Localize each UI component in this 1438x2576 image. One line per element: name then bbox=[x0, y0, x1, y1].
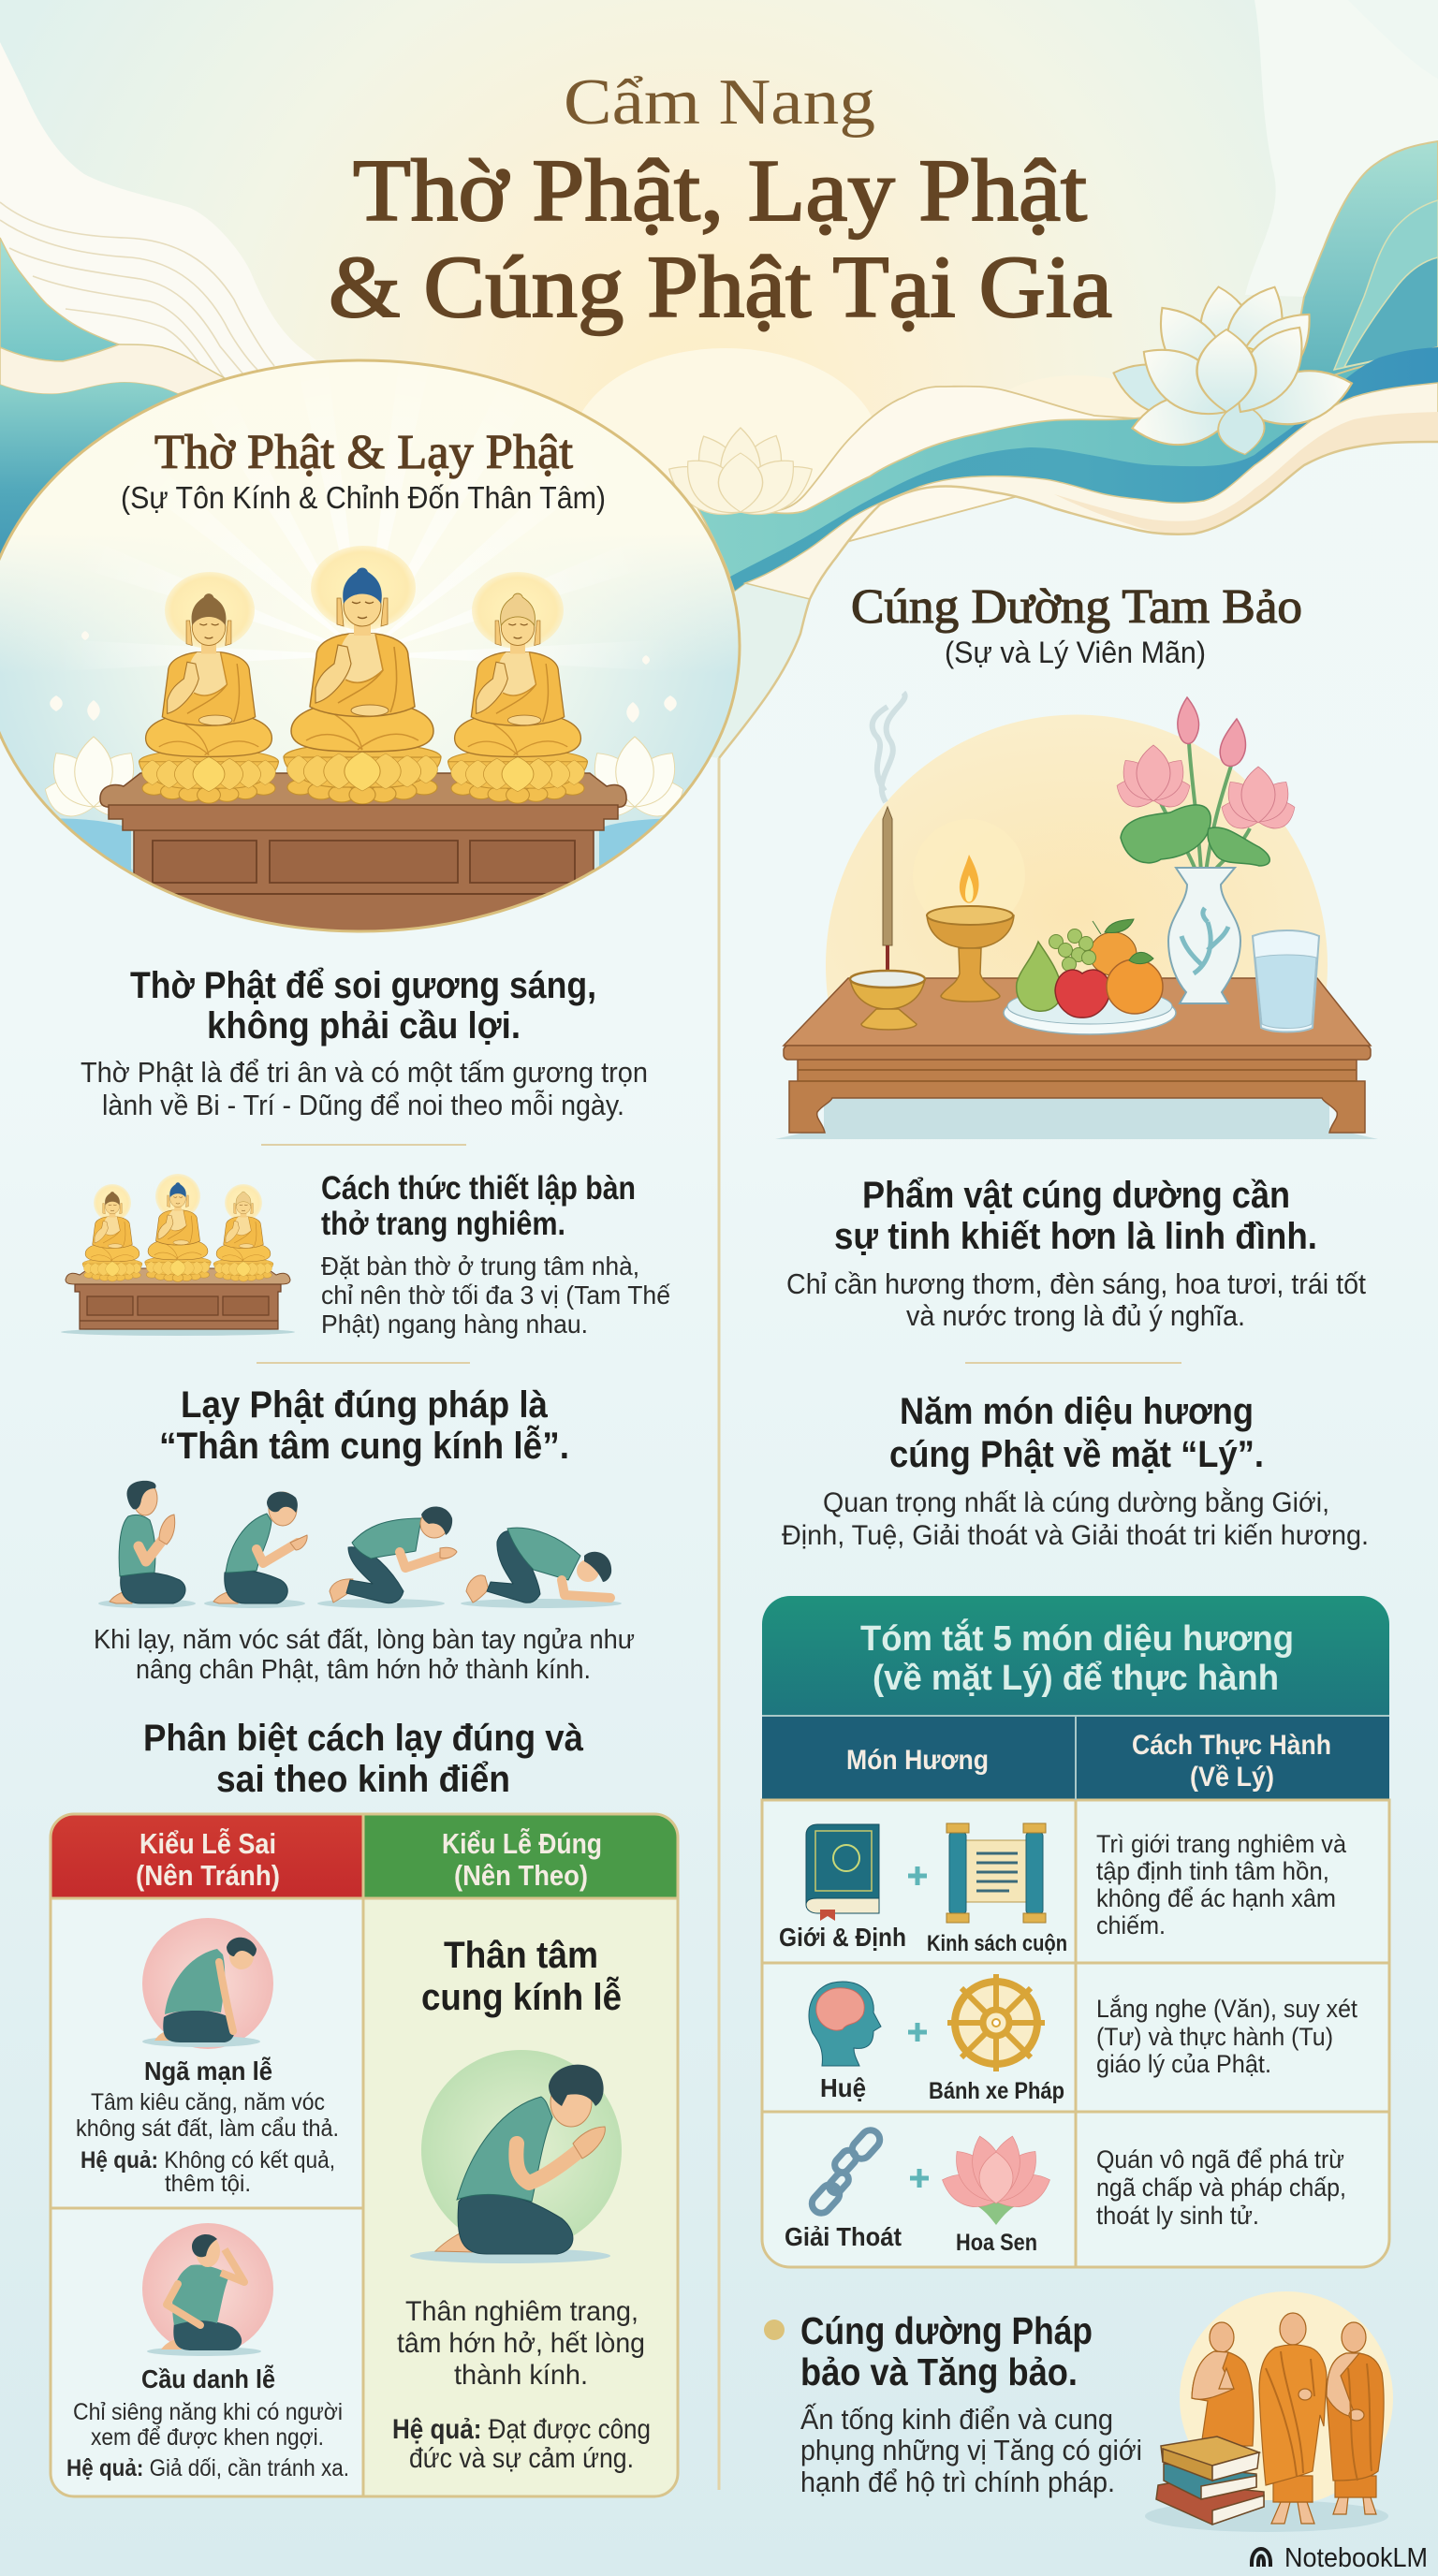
label: Giải Thoát: Giải Thoát bbox=[785, 2222, 902, 2251]
icon: oil lamp bbox=[913, 819, 1025, 1002]
icon: dharma wheel bbox=[947, 1974, 1045, 2071]
text: Cầu danh lễ bbox=[66, 2364, 349, 2481]
text: Năm món diệu hương: Quan trọng nhất là cúng dường bằng Giới, bbox=[823, 1487, 1329, 1518]
text: right description: đức và sự cảm ứng. bbox=[409, 2443, 634, 2474]
text: Thân tâm cung kính lễ: cung kính lễ bbox=[421, 1975, 622, 2018]
icon: broken chain bbox=[808, 2127, 884, 2217]
label: Kiểu Lễ Đúng: (Nên Theo) bbox=[454, 1859, 588, 1892]
illustration: four prostration poses bbox=[98, 1481, 622, 1608]
text: row 2 practice: (Tư) và thực hành (Tu) bbox=[1096, 2023, 1333, 2051]
bullet bbox=[764, 2320, 785, 2340]
text: altar setup: thở trang nghiêm. bbox=[321, 1206, 565, 1242]
text: Ngã mạn lễ bbox=[76, 2056, 339, 2197]
text: Cúng dường Pháp bảo: bảo và Tăng bảo. bbox=[800, 2350, 1078, 2393]
icon: pink lotus bbox=[937, 2132, 1055, 2225]
title: Thờ Phật, Lạy Phật bbox=[353, 142, 1087, 240]
text: Cúng dường Pháp bảo bbox=[800, 2309, 1142, 2498]
text: Ngã mạn lễ: Tâm kiêu căng, năm vóc bbox=[91, 2089, 325, 2115]
text: Khi lạy: Khi lạy, năm vóc sát đất, lòng bàn tay ngửa như bbox=[94, 1625, 635, 1655]
text: Thờ Phật để soi gương sáng bbox=[81, 965, 648, 1121]
subheading: Sự và Lý: (Sự và Lý Viên Mãn) bbox=[945, 636, 1206, 669]
text: altar setup: Phật) ngang hàng nhau. bbox=[321, 1310, 588, 1339]
plus bbox=[908, 2023, 927, 2042]
icon: head with brain bbox=[809, 1982, 881, 2066]
text: Năm món diệu hương bbox=[782, 1391, 1369, 1551]
text: Cúng dường Pháp bảo: Cúng dường Pháp bbox=[800, 2309, 1093, 2352]
text: Thân tâm cung kính lễ bbox=[421, 1935, 622, 2018]
icon: water glass bbox=[1253, 930, 1319, 1032]
illustration: correct bow bbox=[410, 2050, 622, 2263]
text: right description: tâm hớn hở, hết lòng bbox=[397, 2328, 645, 2359]
text: Cúng dường Pháp bảo: phụng những vị Tăng có giới bbox=[800, 2434, 1142, 2466]
logo: NotebookLM: NotebookLM bbox=[1284, 2543, 1428, 2573]
text: row 1 practice: không để ác hạnh xâm bbox=[1096, 1884, 1336, 1912]
column header: right bbox=[363, 1814, 678, 1898]
illustration: Cầu danh lễ bbox=[142, 2223, 273, 2356]
illustration: Ngã mạn lễ bbox=[142, 1918, 273, 2049]
table title: (về mặt Lý) để thực hành bbox=[873, 1659, 1279, 1698]
text: row 2 practice bbox=[1096, 1994, 1357, 2078]
heading: Phân biệt cách lạy: Phân biệt cách lạy đúng và bbox=[143, 1718, 584, 1759]
text: Phẩm vật cúng dường: sự tinh khiết hơn là linh đình. bbox=[834, 1216, 1317, 1257]
table title: Tóm tắt 5 món diệu hương bbox=[860, 1617, 1294, 1659]
text: Năm món diệu hương: Định, Tuệ, Giải thoát và Giải thoát tri kiến hương. bbox=[782, 1520, 1369, 1551]
text: Cầu danh lễ: Chỉ siêng năng khi có người bbox=[73, 2399, 343, 2425]
icon: incense bbox=[850, 693, 925, 1030]
heading: Phân biệt cách lạy: sai theo kinh điển bbox=[216, 1759, 510, 1800]
text: row 3 practice: Quán vô ngã để phá trừ bbox=[1096, 2145, 1344, 2174]
column header: Cách Thực Hành: (Về Lý) bbox=[1190, 1762, 1274, 1793]
label: Huệ: Huệ bbox=[820, 2073, 866, 2102]
text: altar setup: Cách thức thiết lập bàn bbox=[321, 1170, 636, 1207]
text: Cúng dường Pháp bảo: hạnh để hộ trì chính pháp. bbox=[800, 2466, 1115, 2498]
column header: Món Hương: Món Hương bbox=[846, 1745, 989, 1776]
icon: large white lotus bbox=[1106, 276, 1358, 458]
text: row 3 practice: ngã chấp và pháp chấp, bbox=[1096, 2174, 1346, 2202]
central divider line bbox=[717, 758, 721, 2490]
label: Kiểu Lễ Đúng: Kiểu Lễ Đúng bbox=[442, 1827, 602, 1860]
text: altar setup: Đặt bàn thờ ở trung tâm nhà, bbox=[321, 1251, 639, 1281]
text: Phẩm vật cúng dường: và nước trong là đủ ý nghĩa. bbox=[906, 1299, 1245, 1332]
title: Cẩm Nang bbox=[564, 66, 875, 139]
text: Cúng dường Pháp bảo: Ấn tống kinh điển và cung bbox=[800, 2403, 1113, 2436]
label: Bánh xe Pháp: Bánh xe Pháp bbox=[929, 2078, 1064, 2104]
title: & Cúng Phật Tại Gia bbox=[329, 239, 1112, 336]
text: row 1 practice: chiếm. bbox=[1096, 1911, 1166, 1939]
text: Khi lạy bbox=[94, 1625, 635, 1685]
label: Kiểu Lễ Sai: Kiểu Lễ Sai bbox=[139, 1827, 276, 1860]
icon: fruit plate bbox=[1004, 919, 1176, 1034]
heading: Phân biệt cách lạy bbox=[143, 1718, 584, 1800]
text: altar setup bbox=[321, 1170, 670, 1339]
text: row 1 practice bbox=[1096, 1830, 1347, 1939]
text: Ngã mạn lễ: Ngã mạn lễ bbox=[144, 2056, 272, 2086]
monk right bbox=[1327, 2322, 1384, 2514]
text: Thờ Phật để soi gương sáng: không phải cầu lợi. bbox=[207, 1005, 521, 1046]
column header: wrong bbox=[51, 1814, 363, 1898]
table title bbox=[860, 1617, 1294, 1698]
text: Cầu danh lễ: Cầu danh lễ bbox=[141, 2364, 275, 2393]
text: row 2 practice: giáo lý của Phật. bbox=[1096, 2050, 1271, 2078]
column header: Cách Thực Hành bbox=[1132, 1730, 1331, 1793]
text: Ngã mạn lễ: Hệ quả: Không có kết quả, bbox=[81, 2147, 335, 2174]
heading: Thờ Phật & Lạy Phật: Thờ Phật & Lạy Phật bbox=[154, 426, 574, 479]
title bbox=[329, 66, 1112, 336]
text: row 3 practice: thoát ly sinh tử. bbox=[1096, 2202, 1259, 2230]
text: Thờ Phật để soi gương sáng: lành về Bi - Trí - Dũng để noi theo mỗi ngày. bbox=[102, 1089, 624, 1121]
text: row 1 practice: Trì giới trang nghiêm và bbox=[1096, 1830, 1347, 1858]
text: right description: thành kính. bbox=[454, 2360, 588, 2391]
illustration: offering table bbox=[775, 693, 1378, 1139]
text: Năm món diệu hương: cúng Phật về mặt “Lý”. bbox=[889, 1434, 1264, 1475]
text: row 1 practice: tập định tinh tâm hồn, bbox=[1096, 1857, 1329, 1885]
label: Kiểu Lễ Đúng bbox=[442, 1827, 602, 1892]
icon: faint lotus bbox=[659, 427, 822, 528]
illustration: monks and books bbox=[1145, 2291, 1393, 2532]
plus bbox=[910, 2169, 929, 2188]
text: altar setup: chỉ nên thờ tối đa 3 vị (Tam Thế bbox=[321, 1281, 670, 1310]
text: Lạy Phật đúng pháp: Lạy Phật đúng pháp là bbox=[181, 1384, 549, 1426]
monk centre bbox=[1259, 2313, 1327, 2524]
label: Kinh sách cuộn: Kinh sách cuộn bbox=[927, 1931, 1067, 1956]
illustration: three Buddhas on altar bbox=[45, 510, 683, 930]
text: Phẩm vật cúng dường: Chỉ cần hương thơm, đèn sáng, hoa tươi, trái tốt bbox=[786, 1267, 1366, 1300]
text: Phẩm vật cúng dường: Phẩm vật cúng dường cần bbox=[862, 1175, 1290, 1216]
pose 4 bbox=[461, 1528, 622, 1608]
pose 3 bbox=[317, 1506, 457, 1608]
label: Kiểu Lễ Sai bbox=[136, 1827, 280, 1892]
text: Cầu danh lễ: Hệ quả: Giả dối, cần tránh xa. bbox=[66, 2455, 349, 2481]
text: Khi lạy: nâng chân Phật, tâm hớn hở thành kính. bbox=[136, 1655, 591, 1685]
text: Lạy Phật đúng pháp: “Thân tâm cung kính lễ”. bbox=[159, 1424, 569, 1467]
icon: book bbox=[806, 1824, 879, 1921]
text: Thân tâm cung kính lễ: Thân tâm bbox=[444, 1935, 598, 1976]
plus bbox=[908, 1866, 927, 1885]
books bbox=[1156, 2437, 1264, 2525]
text: Phẩm vật cúng dường bbox=[786, 1175, 1366, 1332]
text: Ngã mạn lễ: không sát đất, làm cẩu thả. bbox=[76, 2115, 339, 2142]
illustration: small altar bbox=[61, 1174, 295, 1336]
text: Ngã mạn lễ: thêm tội. bbox=[165, 2171, 251, 2197]
column header: Cách Thực Hành: Cách Thực Hành bbox=[1132, 1730, 1331, 1761]
text: Năm món diệu hương: Năm món diệu hương bbox=[900, 1391, 1254, 1432]
pose 1 bbox=[98, 1481, 196, 1608]
text: Lạy Phật đúng pháp bbox=[159, 1384, 569, 1467]
text: Thờ Phật để soi gương sáng: Thờ Phật để soi gương sáng, bbox=[130, 965, 596, 1006]
label: Giới & Định: Giới & Định bbox=[779, 1923, 906, 1952]
panel: Buddha oval bbox=[0, 348, 740, 945]
subheading: (Sự Tôn Kính & Chỉnh Đốn Thân Tâm) bbox=[121, 480, 606, 515]
icon: vase with lotus flowers bbox=[1112, 697, 1299, 1003]
label: Kiểu Lễ Sai: (Nên Tránh) bbox=[136, 1859, 280, 1892]
heading: Cúng Dường Tam Bảo: Cúng Dường Tam Bảo bbox=[851, 580, 1302, 634]
text: Cầu danh lễ: xem để được khen ngợi. bbox=[91, 2424, 324, 2451]
text: row 3 practice bbox=[1096, 2145, 1346, 2230]
panel: comparison table bbox=[51, 1814, 678, 2496]
text: row 2 practice: Lắng nghe (Văn), suy xét bbox=[1096, 1994, 1357, 2023]
icon: scroll bbox=[946, 1823, 1046, 1923]
text: right description: Thân nghiêm trang, bbox=[405, 2296, 638, 2327]
label: Hoa Sen: Hoa Sen bbox=[956, 2230, 1037, 2256]
monk left bbox=[1192, 2322, 1254, 2446]
text: right description: Hệ quả: Đạt được công bbox=[392, 2414, 651, 2445]
text: Thờ Phật để soi gương sáng: Thờ Phật là để tri ân và có một tấm gương trọn bbox=[81, 1056, 648, 1089]
text: right description bbox=[392, 2296, 651, 2474]
pose 2 bbox=[204, 1492, 307, 1608]
panel: summary table bbox=[762, 1596, 1389, 2267]
